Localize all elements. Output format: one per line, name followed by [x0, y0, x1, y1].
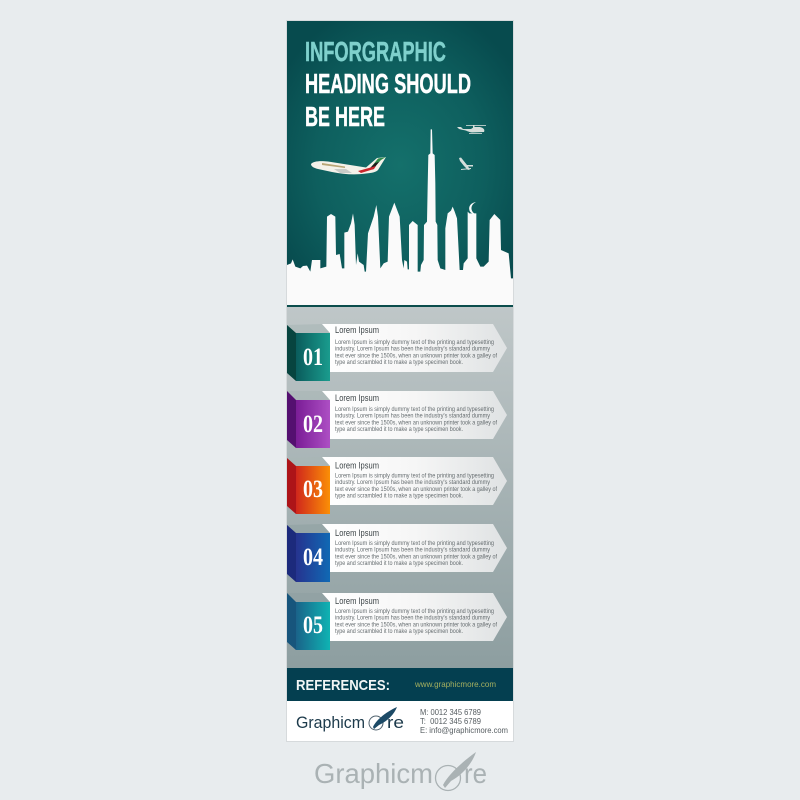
text block 03: text ever since the 1500s, when an unknown printer took a galley of — [335, 486, 497, 493]
watermark logo: re — [464, 758, 487, 789]
number block 05 — [287, 593, 330, 650]
panel: list background — [287, 307, 513, 668]
text block 02: Lorem Ipsum — [335, 393, 379, 403]
contact details: T: 0012 345 6789 — [420, 717, 482, 726]
text block 04: text ever since the 1500s, when an unknown printer took a galley of — [335, 553, 497, 560]
arrow banner 03 — [322, 457, 507, 505]
arrow banner 04 — [322, 524, 507, 572]
arrow banner 05 — [322, 593, 507, 641]
text block 05: text ever since the 1500s, when an unknown printer took a galley of — [335, 621, 497, 628]
text block 01: type and scrambled it to make a type specimen book. — [335, 359, 463, 366]
item 04 — [287, 524, 507, 582]
number block 04: 04 — [303, 544, 323, 571]
item 02 — [287, 391, 507, 448]
heading: HEADING SHOULD — [305, 68, 471, 99]
item 01 — [287, 324, 507, 381]
text block 02: type and scrambled it to make a type specimen book. — [335, 426, 463, 433]
infographic card — [286, 20, 514, 742]
text block 05 — [335, 596, 497, 635]
text block 04: industry. Lorem Ipsum has been the industry's standard dummy — [335, 547, 491, 554]
arrow banner 02 — [322, 391, 507, 439]
number block 03: 03 — [303, 476, 323, 503]
number block 01: 01 — [303, 344, 323, 371]
text block 03 — [335, 460, 497, 500]
text block 02 — [335, 393, 497, 433]
text block 05: Lorem Ipsum is simply dummy text of the printing and typesetting — [335, 608, 494, 615]
panel: header — [287, 21, 513, 307]
skyline — [287, 129, 513, 305]
heading — [305, 36, 471, 132]
number block 02 — [287, 391, 330, 448]
item 05 — [287, 593, 507, 650]
contact details: E: info@graphicmore.com — [420, 726, 508, 735]
footer logo: re — [387, 713, 404, 732]
text block 02: text ever since the 1500s, when an unknown printer took a galley of — [335, 419, 497, 426]
footer logo — [296, 707, 404, 732]
text block 04 — [335, 528, 497, 567]
text block 04: Lorem Ipsum — [335, 528, 379, 538]
heading: BE HERE — [305, 101, 385, 132]
text block 01 — [335, 325, 497, 366]
text block 02: Lorem Ipsum is simply dummy text of the printing and typesetting — [335, 406, 494, 413]
heading: INFORGRAPHIC — [305, 36, 446, 67]
item 03 — [287, 457, 507, 514]
references band — [287, 668, 513, 701]
text block 01: industry. Lorem Ipsum has been the industry's standard dummy — [335, 346, 491, 353]
icon: helicopter — [457, 125, 486, 134]
footer logo: Graphicm — [296, 713, 365, 732]
watermark logo — [314, 752, 487, 790]
text block 01: text ever since the 1500s, when an unknown printer took a galley of — [335, 352, 497, 359]
icon: watermark pen nib — [436, 752, 476, 790]
text block 03: Lorem Ipsum is simply dummy text of the printing and typesetting — [335, 472, 494, 480]
icon: airliner — [311, 157, 386, 174]
text block 05: type and scrambled it to make a type specimen book. — [335, 628, 463, 635]
text block 03: type and scrambled it to make a type specimen book. — [335, 492, 463, 500]
text block 03: industry. Lorem Ipsum has been the industry's standard dummy — [335, 479, 491, 486]
number block 02: 02 — [303, 411, 323, 438]
arrow banner 01 — [322, 324, 507, 372]
text block 02: industry. Lorem Ipsum has been the industry's standard dummy — [335, 413, 491, 420]
references band: REFERENCES: — [296, 677, 390, 694]
contact details — [420, 708, 508, 735]
text block 05: Lorem Ipsum — [335, 596, 379, 606]
text block 01: Lorem Ipsum — [335, 325, 379, 335]
number block 01 — [287, 325, 330, 381]
watermark logo: Graphicm — [314, 758, 433, 789]
references band: www.graphicmore.com — [414, 679, 496, 689]
icon: crescent moon — [469, 202, 476, 214]
text block 05: industry. Lorem Ipsum has been the industry's standard dummy — [335, 615, 491, 622]
number block 05: 05 — [303, 612, 323, 639]
text block 04: type and scrambled it to make a type specimen book. — [335, 560, 463, 567]
text block 03: Lorem Ipsum — [335, 460, 379, 470]
number block 04 — [287, 525, 330, 582]
number block 03 — [287, 458, 330, 514]
icon: small aircraft — [459, 158, 473, 170]
contact details: M: 0012 345 6789 — [420, 708, 482, 717]
text block 01: Lorem Ipsum is simply dummy text of the printing and typesetting — [335, 339, 494, 346]
icon: pen nib in circle — [369, 707, 397, 730]
text block 04: Lorem Ipsum is simply dummy text of the printing and typesetting — [335, 540, 494, 547]
